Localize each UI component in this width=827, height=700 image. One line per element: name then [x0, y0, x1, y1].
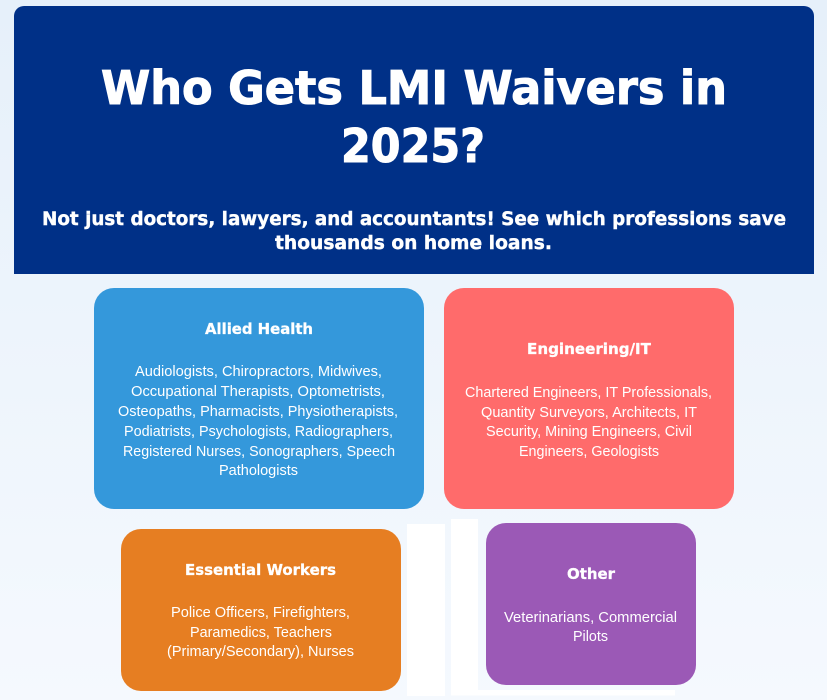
text: allied health professions: Registered Nurses, Sonographers, Speech — [123, 444, 395, 460]
text: engineering professions: Security, Mining Engineers, Civil — [486, 424, 692, 440]
heading: Other: Other — [567, 565, 615, 583]
text: other professions: Veterinarians, Commercial — [504, 610, 677, 626]
title: 2025? — [341, 119, 485, 173]
title: Who Gets LMI Waivers in — [101, 61, 727, 115]
heading: Engineering/IT: Engineering/IT — [527, 340, 651, 358]
heading: Allied Health: Allied Health — [205, 320, 313, 338]
subtitle: thousands on home loans. — [275, 232, 552, 254]
white block: left column — [407, 524, 445, 696]
text: essential worker professions: Paramedics, Teachers — [190, 625, 332, 641]
text: allied health professions: Audiologists, Chiropractors, Midwives, — [135, 364, 382, 380]
text: essential worker professions: (Primary/Secondary), Nurses — [167, 644, 354, 660]
text: allied health professions: Pathologists — [219, 463, 298, 479]
panel: Engineering/IT — [444, 288, 734, 509]
subtitle: Not just doctors, lawyers, and accountants! See which professions save — [42, 208, 786, 230]
text: engineering professions: Engineers, Geologists — [519, 444, 659, 460]
heading: Essential Workers: Essential Workers — [185, 561, 336, 579]
text: allied health professions: Podiatrists, Psychologists, Radiographers, — [124, 424, 393, 440]
text: engineering professions — [465, 385, 712, 460]
text: allied health professions: Osteopaths, Pharmacists, Physiotherapists, — [118, 404, 398, 420]
text: engineering professions: Quantity Surveyors, Architects, IT — [481, 405, 697, 421]
text: essential worker professions — [167, 605, 354, 660]
white block: right L-shape — [451, 519, 675, 696]
text: other professions: Pilots — [573, 629, 608, 645]
text: essential worker professions: Police Officers, Firefighters, — [171, 605, 350, 621]
panel: Essential Workers — [121, 529, 401, 691]
text: allied health professions: Occupational Therapists, Optometrists, — [131, 384, 385, 400]
panel: Other — [486, 523, 696, 685]
text: other professions — [504, 610, 677, 645]
subtitle — [42, 208, 786, 254]
panel: Allied Health — [94, 288, 424, 509]
title — [101, 61, 727, 173]
text: allied health professions — [118, 364, 398, 479]
text: engineering professions: Chartered Engineers, IT Professionals, — [465, 385, 712, 401]
header banner — [14, 6, 814, 274]
